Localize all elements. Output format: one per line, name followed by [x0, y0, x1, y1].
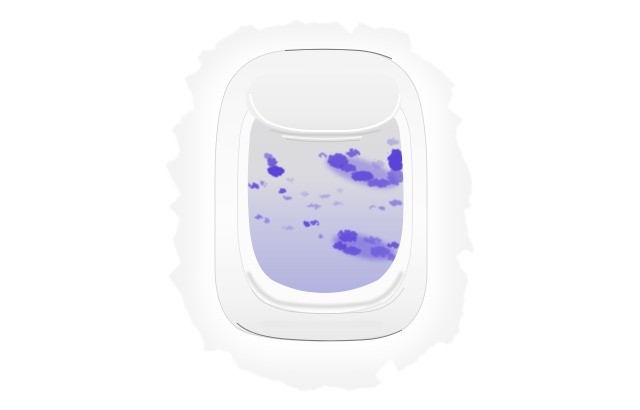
- inner reveal bottom shadow: [248, 272, 402, 306]
- inner recess: [237, 96, 413, 314]
- shade sill highlight: [282, 136, 362, 139]
- outer window frame: [215, 49, 427, 341]
- frame dark highlight bottom: [237, 323, 402, 341]
- frame dark highlight top: [285, 49, 392, 59]
- watercolor background blob: [167, 21, 475, 390]
- inner reveal secondary line: [252, 288, 404, 314]
- clouds: [249, 139, 404, 261]
- illustration: airplane window: [166, 20, 474, 390]
- shade sill shadow: [285, 139, 360, 142]
- window shade: [246, 72, 401, 142]
- soft white glow around frame: [198, 42, 444, 362]
- cloud haze: [322, 149, 402, 265]
- shade lower highlight: [250, 94, 400, 131]
- sky view: [248, 117, 404, 293]
- lower frame grey band: [262, 322, 382, 327]
- shade lower shadow: [270, 130, 380, 135]
